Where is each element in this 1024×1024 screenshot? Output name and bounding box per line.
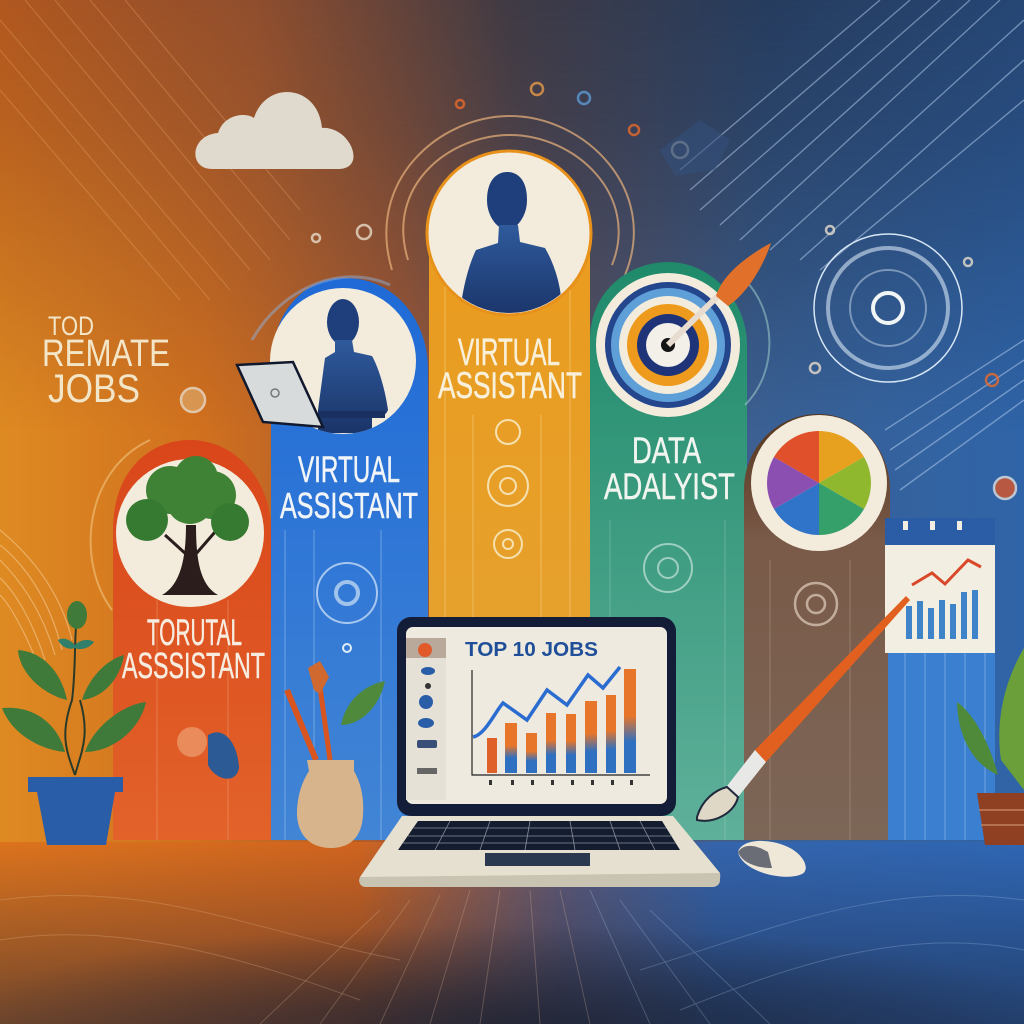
label	[438, 332, 582, 406]
plant right	[957, 648, 1024, 845]
pot	[28, 777, 123, 845]
icon: color wheel	[751, 415, 887, 551]
title: top remote jobs: TOD	[48, 311, 94, 341]
label	[280, 449, 418, 526]
title: top remote jobs: REMATE	[42, 333, 170, 375]
laptop bar chart	[472, 667, 650, 785]
label: TORUTAL	[147, 612, 242, 653]
label: VIRTUAL	[298, 449, 400, 490]
icon: cloud	[195, 92, 354, 169]
label: ADALYIST	[604, 466, 735, 507]
icon: tree	[116, 456, 264, 607]
title: top remote jobs: JOBS	[48, 367, 140, 411]
column: brown	[744, 414, 890, 840]
arcs around top circle	[386, 116, 634, 275]
icon: mouse	[738, 841, 806, 877]
column: right blue	[888, 640, 995, 840]
laptop heading: TOP 10 JOBS	[465, 639, 598, 661]
icon: paintbrush	[697, 596, 910, 821]
icon: person portrait	[427, 151, 591, 320]
label: ASSISTANT	[280, 485, 418, 526]
decorative dots	[181, 83, 1016, 499]
floor	[0, 842, 1024, 1024]
column: blue virtual assistant	[237, 277, 428, 840]
icon: person with laptop	[237, 288, 416, 434]
column: green data analyst	[590, 243, 771, 840]
label: ASSISTANT	[438, 365, 582, 406]
icon: target with brush	[596, 243, 771, 417]
label: DATA	[632, 430, 701, 471]
label: VIRTUAL	[458, 332, 560, 374]
vase with brushes	[287, 661, 385, 848]
label	[604, 430, 735, 507]
title: top remote jobs	[42, 311, 170, 411]
laptop	[359, 617, 720, 887]
column: yellow virtual assistant	[426, 150, 592, 617]
label: ASSSISTANT	[122, 645, 265, 686]
calendar chart card	[885, 518, 995, 653]
column: orange tutorial	[91, 440, 271, 840]
icon: target rings right	[814, 234, 962, 382]
label	[122, 612, 265, 686]
plant left	[2, 601, 146, 845]
